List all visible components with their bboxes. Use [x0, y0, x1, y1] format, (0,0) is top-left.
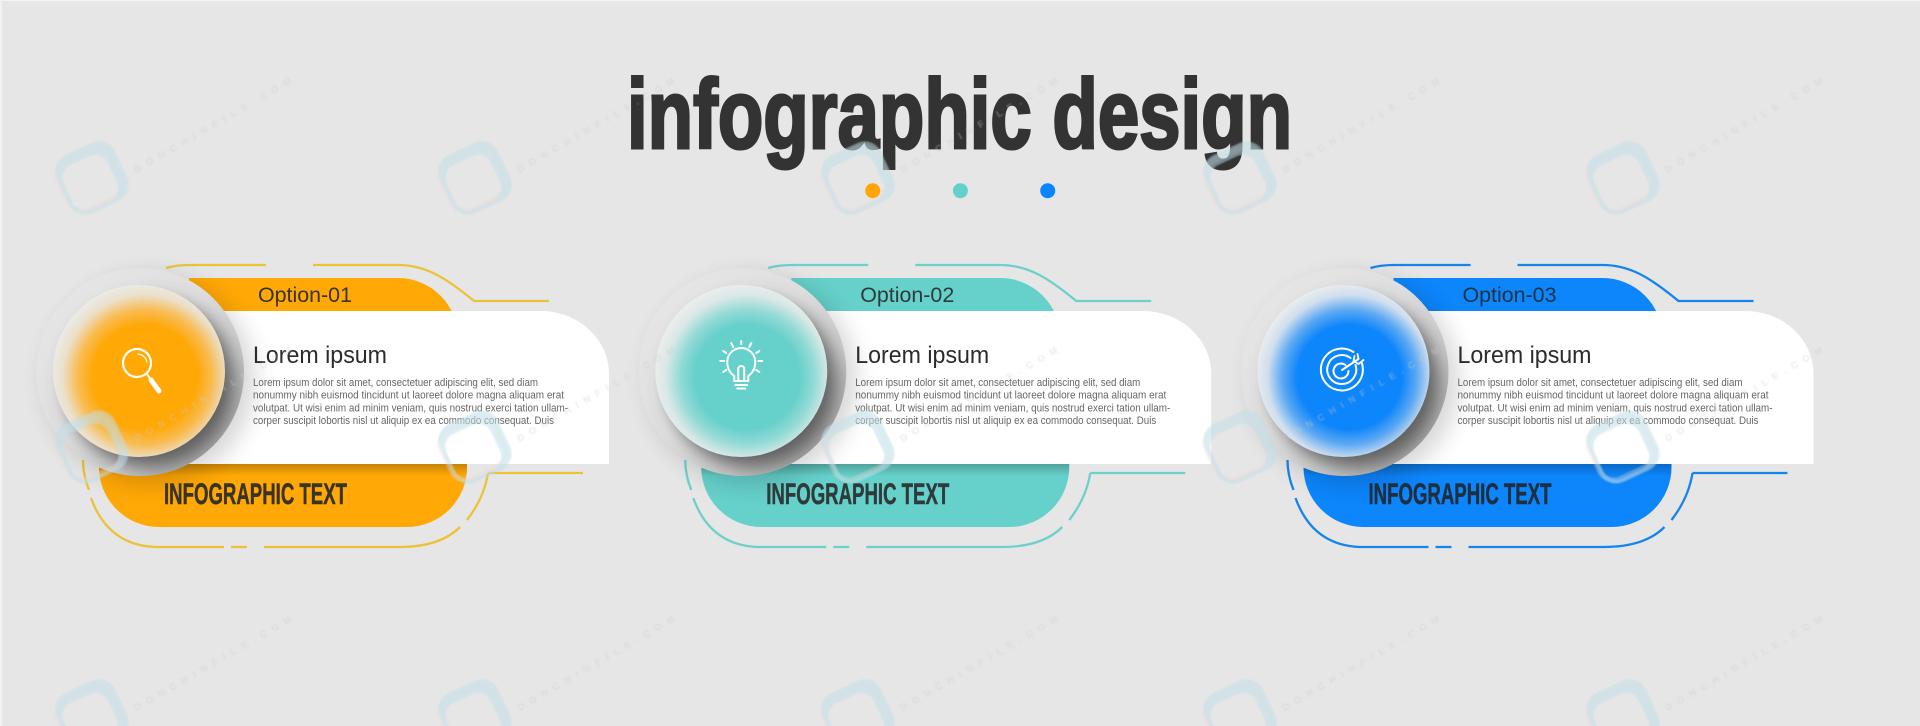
body text: volutpat. Ut wisi enim ad minim veniam, quis nostrud exerci tation ullam-	[855, 402, 1171, 414]
watermark layer: DONCHINFILE.COM	[516, 345, 677, 445]
body text: Lorem ipsum dolor sit amet, consectetuer adipiscing elit, sed diam	[855, 377, 1140, 389]
white card	[1304, 311, 1814, 464]
white card	[702, 311, 1211, 464]
body text: Lorem ipsum dolor sit amet, consectetuer adipiscing elit, sed diam	[1458, 377, 1743, 389]
watermark layer: DONCHINFILE.COM	[899, 76, 1060, 176]
body text: volutpat. Ut wisi enim ad minim veniam, quis nostrud exerci tation ullam-	[253, 402, 568, 414]
icon circle	[53, 285, 225, 457]
icon circle	[1258, 285, 1430, 457]
body text	[253, 377, 568, 427]
watermark layer: DONCHINFILE.COM	[133, 614, 294, 714]
body text: nonummy nibh euismod tincidunt ut laoreet dolore magna aliquam erat	[253, 390, 564, 402]
circle shadow disc	[643, 271, 846, 476]
bar label: INFOGRAPHIC TEXT	[766, 478, 949, 511]
option label: Option-03	[1462, 284, 1556, 307]
body text: volutpat. Ut wisi enim ad minim veniam, quis nostrud exerci tation ullam-	[1458, 402, 1773, 414]
option label: Option-02	[860, 284, 954, 307]
watermark layer: DONCHINFILE.COM	[516, 76, 677, 176]
body text: nonummy nibh euismod tincidunt ut laoreet dolore magna aliquam erat	[855, 390, 1166, 402]
watermark layer: DONCHINFILE.COM	[1281, 345, 1442, 445]
heading: Lorem ipsum	[1458, 342, 1592, 369]
watermark layer: DONCHINFILE.COM	[899, 345, 1060, 445]
tab: option label	[791, 278, 1060, 338]
infographic text bar	[99, 450, 467, 527]
panel: option 03	[1234, 260, 1814, 547]
title: infographic design	[627, 59, 1292, 169]
heading: Lorem ipsum	[253, 342, 387, 369]
heading: Lorem ipsum	[855, 342, 989, 369]
watermark layer: DONCHINFILE.COM	[133, 345, 294, 445]
white card	[100, 311, 609, 464]
colour dots	[865, 183, 1055, 198]
body text: corper suscipit lobortis nisl ut aliquip ex ea commodo consequat. Duis	[1458, 415, 1758, 427]
body text: nonummy nibh euismod tincidunt ut laoreet dolore magna aliquam erat	[1458, 390, 1769, 402]
icon: magnifier	[123, 349, 159, 391]
outline strokes	[685, 265, 1185, 547]
panel: option 01	[30, 260, 609, 547]
body text: corper suscipit lobortis nisl ut aliquip ex ea commodo consequat. Duis	[855, 415, 1156, 427]
body text: Lorem ipsum dolor sit amet, consectetuer adipiscing elit, sed diam	[253, 377, 538, 389]
watermark layer: DONCHINFILE.COM	[516, 614, 677, 714]
tab: option label	[1394, 278, 1662, 338]
panel: option 02	[632, 260, 1211, 547]
body text	[1458, 377, 1773, 427]
option label: Option-01	[258, 284, 352, 307]
bar label: INFOGRAPHIC TEXT	[164, 478, 347, 511]
watermark layer: DONCHINFILE.COM	[1281, 614, 1442, 714]
watermark layer: DONCHINFILE.COM	[1664, 76, 1825, 176]
watermark layer: DONCHINFILE.COM	[899, 614, 1060, 714]
icon: light bulb	[720, 341, 762, 388]
outline strokes	[1288, 265, 1788, 547]
icon: target	[1321, 348, 1364, 390]
watermark layer: DONCHINFILE.COM	[133, 76, 294, 176]
circle shadow disc	[1246, 271, 1448, 476]
body text	[855, 377, 1171, 427]
infographic text bar	[701, 450, 1069, 527]
icon circle	[655, 285, 827, 457]
outline strokes	[83, 265, 583, 547]
watermark layer: DONCHINFILE.COM	[1281, 76, 1442, 176]
body text: corper suscipit lobortis nisl ut aliquip ex ea commodo consequat. Duis	[253, 415, 554, 427]
bar label: INFOGRAPHIC TEXT	[1368, 478, 1552, 511]
circle shadow disc	[40, 271, 244, 476]
watermark layer: DONCHINFILE.COM	[1664, 345, 1825, 445]
watermark layer: DONCHINFILE.COM	[1664, 614, 1825, 714]
tab: option label	[189, 278, 458, 338]
infographic text bar	[1304, 450, 1672, 527]
